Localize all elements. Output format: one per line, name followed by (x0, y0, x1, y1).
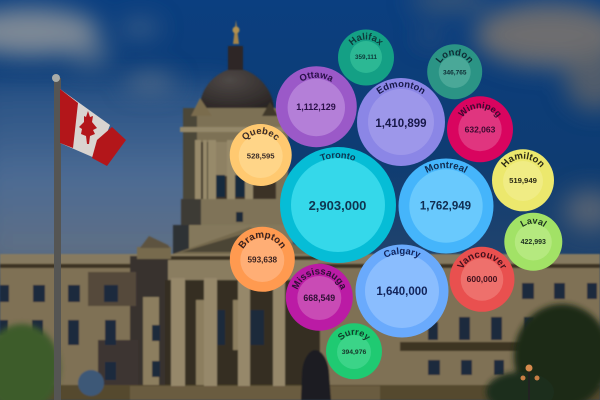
bubble: Surrey: 394,976 (342, 349, 366, 356)
flag pole (52, 74, 61, 400)
bubble: Halifax (338, 30, 394, 86)
bubble: Quebec (230, 124, 292, 186)
bubble: Ottawa (276, 66, 357, 148)
bubble: Vancouver: 600,000 (467, 274, 498, 284)
bubble: London (427, 44, 482, 100)
bubble: Mississauga (286, 264, 353, 331)
bubble: Edmonton (357, 78, 445, 166)
bubble: Toronto: 2,903,000 (309, 198, 366, 213)
bubble: Ottawa: 1,112,129 (296, 102, 336, 112)
bubble: Calgary: Calgary (384, 247, 421, 258)
drum (183, 108, 288, 233)
bubble: Halifax: 359,111 (355, 54, 378, 61)
background photo: trees (0, 304, 600, 400)
bubble: Winnipeg: 632,063 (465, 124, 496, 134)
bubble: Mississauga: 668,549 (303, 293, 335, 303)
bubble: London: London (435, 48, 472, 63)
bubble: Montreal (398, 158, 494, 254)
street sign (78, 370, 104, 396)
bubble: London: 346,765 (443, 70, 467, 76)
bubble: Edmonton: Edmonton (376, 82, 424, 94)
bubble: Calgary (356, 244, 448, 338)
bubble: Toronto: Toronto (320, 153, 356, 160)
bubble: Montreal: Montreal (424, 162, 468, 173)
bubble: Quebec: Quebec (242, 127, 279, 140)
bubble: Brampton: 593,638 (247, 256, 278, 264)
street lamp (520, 364, 540, 400)
bubble: Surrey (326, 323, 382, 380)
bubble: Edmonton: 1,410,899 (375, 118, 427, 130)
bubble: Hamilton (492, 149, 554, 212)
bubble: Toronto (280, 147, 396, 263)
bubble: Ottawa: Ottawa (300, 72, 332, 82)
bubble: Winnipeg: Winnipeg (458, 102, 501, 118)
dome (200, 68, 274, 108)
bubble: Winnipeg (447, 96, 513, 162)
bubble: Brampton: Brampton (238, 232, 285, 249)
statue (301, 350, 331, 400)
bubble: Hamilton: Hamilton (500, 152, 544, 168)
bubble: Brampton (230, 226, 295, 292)
windows (0, 283, 597, 380)
bubble: Surrey: Surrey (338, 330, 370, 340)
bubble: Hamilton: 519,949 (509, 176, 537, 185)
bubble: Vancouver: Vancouver (456, 252, 506, 268)
bubble: Vancouver (450, 246, 514, 312)
bubble: Halifax: Halifax (348, 32, 383, 46)
bubble: Mississauga: Mississauga (292, 268, 346, 290)
bubble: Laval: Laval (520, 218, 547, 227)
bubble: Montreal: 1,762,949 (420, 200, 471, 212)
Canadian flag (60, 89, 126, 166)
bubble: Calgary: 1,640,000 (376, 286, 428, 298)
portico (173, 227, 320, 254)
wings (0, 254, 600, 400)
statues on drum (191, 98, 212, 116)
bubble: Quebec: 528,595 (247, 152, 275, 160)
bubble: Laval (504, 212, 562, 271)
bubble: Laval: 422,993 (521, 239, 546, 246)
